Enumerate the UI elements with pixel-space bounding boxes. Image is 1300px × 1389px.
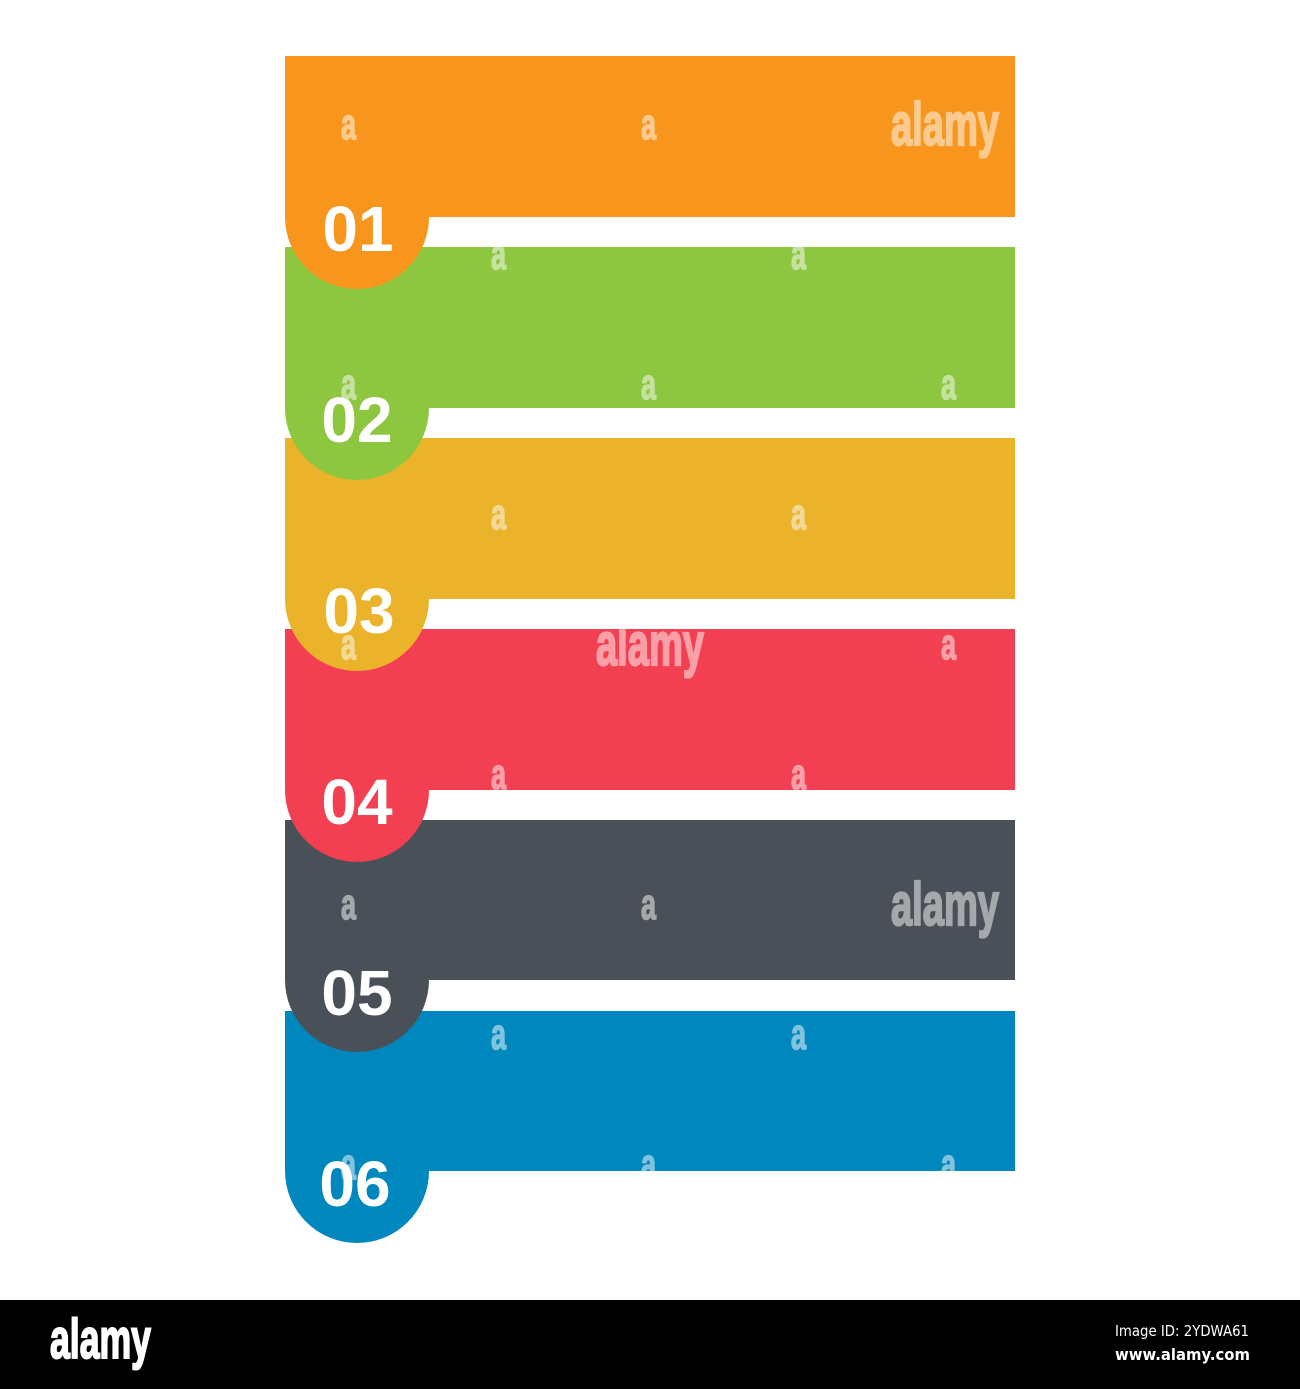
banner 06: 06: [319, 1148, 391, 1220]
banner 04: [285, 629, 1015, 862]
watermarks: alamy: [891, 91, 999, 158]
banner 02: [285, 247, 1015, 480]
banner 03: [285, 438, 1015, 671]
banner 05: [285, 820, 1015, 1052]
watermarks: a: [491, 230, 506, 279]
banner 05: 05: [321, 957, 393, 1029]
watermarks: a: [941, 360, 956, 409]
watermarks: a: [341, 100, 356, 149]
footer logo: alamy: [50, 1307, 151, 1370]
watermarks: a: [641, 880, 656, 929]
watermarks: a: [491, 490, 506, 539]
banner 01: 01: [322, 193, 394, 265]
watermarks: a: [791, 1010, 806, 1059]
banner 04: 04: [321, 766, 393, 838]
footer image id: Image ID: 2YDWA61: [1115, 1322, 1249, 1340]
watermarks: a: [341, 620, 356, 669]
banner 03: 03: [323, 575, 395, 647]
watermarks: a: [941, 1140, 956, 1189]
watermarks: [341, 91, 999, 1189]
banner 01: [285, 56, 1015, 289]
watermarks: a: [491, 750, 506, 799]
watermarks: a: [641, 360, 656, 409]
footer url: www.alamy.com: [1115, 1345, 1250, 1364]
watermarks: alamy: [891, 871, 999, 938]
watermarks: alamy: [596, 611, 704, 678]
watermarks: a: [791, 750, 806, 799]
watermarks: a: [341, 1140, 356, 1189]
banner 06: [285, 1011, 1015, 1243]
watermarks: a: [491, 1010, 506, 1059]
watermarks: a: [341, 360, 356, 409]
watermarks: a: [341, 880, 356, 929]
watermarks: a: [641, 1140, 656, 1189]
footer bar: [0, 1300, 1300, 1389]
watermarks: a: [791, 490, 806, 539]
watermarks: a: [641, 100, 656, 149]
watermarks: a: [791, 230, 806, 279]
watermarks: a: [941, 620, 956, 669]
banner 02: 02: [321, 384, 393, 456]
